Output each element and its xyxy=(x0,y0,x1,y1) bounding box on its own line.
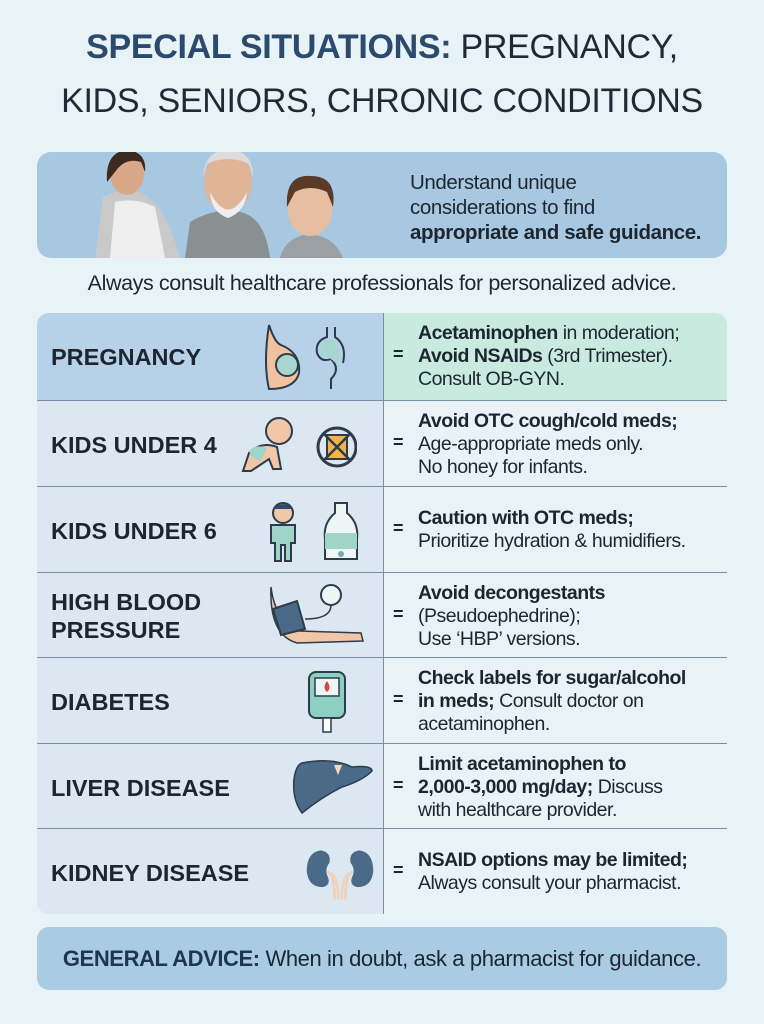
row: pregnancy xyxy=(37,313,727,400)
general advice box xyxy=(37,927,727,990)
table xyxy=(37,313,727,914)
row: diabetes: = xyxy=(393,689,404,709)
row: high blood pressure: HIGH BLOOD xyxy=(51,589,201,615)
row: kids under 4: Avoid OTC cough/cold meds; xyxy=(418,410,677,432)
row: kids under 6: Prioritize hydration & humidifiers. xyxy=(418,530,686,552)
row: kids under 4: No honey for infants. xyxy=(418,456,587,478)
row: diabetes: in meds; Consult doctor on xyxy=(418,690,643,712)
row: kids under 4: = xyxy=(393,432,404,452)
icon: kidneys xyxy=(306,850,374,900)
row: pregnancy: PREGNANCY xyxy=(51,344,201,370)
row: kidney disease: = xyxy=(393,860,404,880)
row: liver disease: = xyxy=(393,775,404,795)
icon: blood pressure cuff xyxy=(270,584,364,644)
row: high blood pressure: PRESSURE xyxy=(51,617,180,643)
row: kids under 4 xyxy=(37,400,727,486)
banner text: appropriate and safe guidance. xyxy=(410,221,701,244)
general advice box: GENERAL ADVICE: When in doubt, ask a pharmacist for guidance. xyxy=(63,946,701,971)
row: kidney disease: NSAID options may be limited; xyxy=(418,849,687,871)
row: liver disease: LIVER DISEASE xyxy=(51,775,230,801)
title xyxy=(61,28,703,120)
row: liver disease: 2,000-3,000 mg/day; Discuss xyxy=(418,776,662,798)
row: kids under 6: Caution with OTC meds; xyxy=(418,507,633,529)
banner text xyxy=(410,171,701,244)
title: KIDS, SENIORS, CHRONIC CONDITIONS xyxy=(61,82,703,120)
row: diabetes: Check labels for sugar/alcohol xyxy=(418,667,686,689)
row: liver disease: with healthcare provider. xyxy=(418,799,617,821)
row: high blood pressure: (Pseudoephedrine); xyxy=(418,605,580,627)
icon: pregnancy xyxy=(265,324,345,390)
row: kids under 6: = xyxy=(393,518,404,538)
row: kids under 4: Age-appropriate meds only. xyxy=(418,433,643,455)
icon: child and humidifier xyxy=(270,502,358,562)
row: kids under 6 xyxy=(37,486,727,572)
row: diabetes xyxy=(37,657,727,743)
row: high blood pressure: Avoid decongestants xyxy=(418,582,605,604)
row: pregnancy: Avoid NSAIDs (3rd Trimester). xyxy=(418,345,673,367)
row: kidney disease: Always consult your pharmacist. xyxy=(418,872,681,894)
banner text: considerations to find xyxy=(410,196,595,219)
row: pregnancy: = xyxy=(393,344,404,364)
row: diabetes: acetaminophen. xyxy=(418,713,550,735)
row: high blood pressure: = xyxy=(393,604,404,624)
icon: glucose meter xyxy=(308,671,346,733)
consult note: Always consult healthcare professionals for personalized advice. xyxy=(88,271,676,295)
row: diabetes: DIABETES xyxy=(51,689,170,715)
row: kids under 6: KIDS UNDER 6 xyxy=(51,518,217,544)
title: SPECIAL SITUATIONS: PREGNANCY, xyxy=(86,28,678,66)
row: kidney disease: KIDNEY DISEASE xyxy=(51,860,249,886)
row: kidney disease xyxy=(37,828,727,914)
banner text: Understand unique xyxy=(410,171,576,194)
row: high blood pressure: Use ‘HBP’ versions. xyxy=(418,628,580,650)
banner xyxy=(37,152,727,258)
row: kids under 4: KIDS UNDER 4 xyxy=(51,432,217,458)
row: liver disease: Limit acetaminophen to xyxy=(418,753,626,775)
row: liver disease xyxy=(37,743,727,828)
row: pregnancy: Consult OB-GYN. xyxy=(418,368,564,390)
icon: baby and honey xyxy=(242,417,357,472)
row: high blood pressure xyxy=(37,572,727,657)
row: pregnancy: Acetaminophen in moderation; xyxy=(418,322,679,344)
icon: liver xyxy=(292,760,373,814)
photo: people xyxy=(95,152,343,258)
